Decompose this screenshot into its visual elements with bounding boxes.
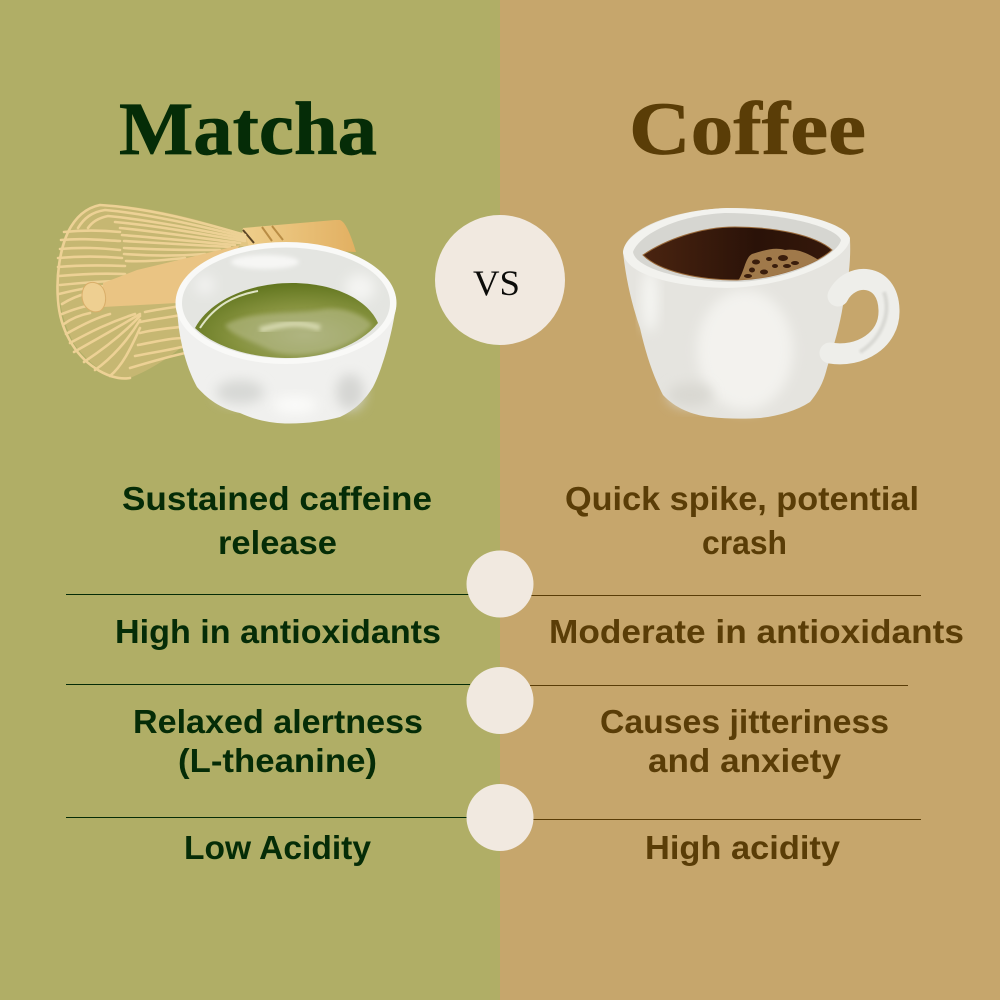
icon: coffee cup: [623, 208, 889, 419]
icon: VS badge: [435, 215, 565, 345]
marker circle 1: [466, 550, 534, 618]
text: matcha alertness: (L-theanine): [178, 742, 377, 779]
icon: matcha bowl: [176, 242, 396, 424]
text: coffee caffeine: crash: [702, 524, 787, 561]
marker circle 3: [466, 784, 534, 851]
text: matcha caffeine: release: [218, 524, 337, 561]
panel: matcha background: [0, 0, 500, 1000]
text: coffee jitteriness: Causes jitteriness: [600, 703, 889, 740]
text: coffee jitteriness: [600, 703, 889, 779]
heading: Matcha: Matcha: [119, 88, 377, 171]
text: matcha caffeine: Sustained caffeine: [122, 480, 432, 517]
text: matcha antioxidants: High in antioxidants: [115, 613, 441, 650]
text: coffee caffeine: Quick spike, potential: [565, 480, 919, 517]
heading: Coffee: Coffee: [629, 88, 866, 171]
text: coffee antioxidants: Moderate in antioxidants: [549, 613, 964, 650]
icon: bamboo whisk: [57, 204, 356, 378]
text: matcha acidity: Low Acidity: [184, 829, 372, 866]
text: matcha caffeine: [122, 480, 432, 561]
label: vs: VS: [473, 263, 520, 303]
marker circle 2: [466, 667, 534, 734]
panel: coffee background: [500, 0, 1000, 1000]
text: coffee caffeine: [565, 480, 919, 561]
divider lines: [66, 594, 921, 820]
text: matcha alertness: [133, 703, 423, 779]
text: matcha alertness: Relaxed alertness: [133, 703, 423, 740]
text: coffee acidity: High acidity: [645, 829, 841, 866]
text: coffee jitteriness: and anxiety: [648, 742, 842, 779]
